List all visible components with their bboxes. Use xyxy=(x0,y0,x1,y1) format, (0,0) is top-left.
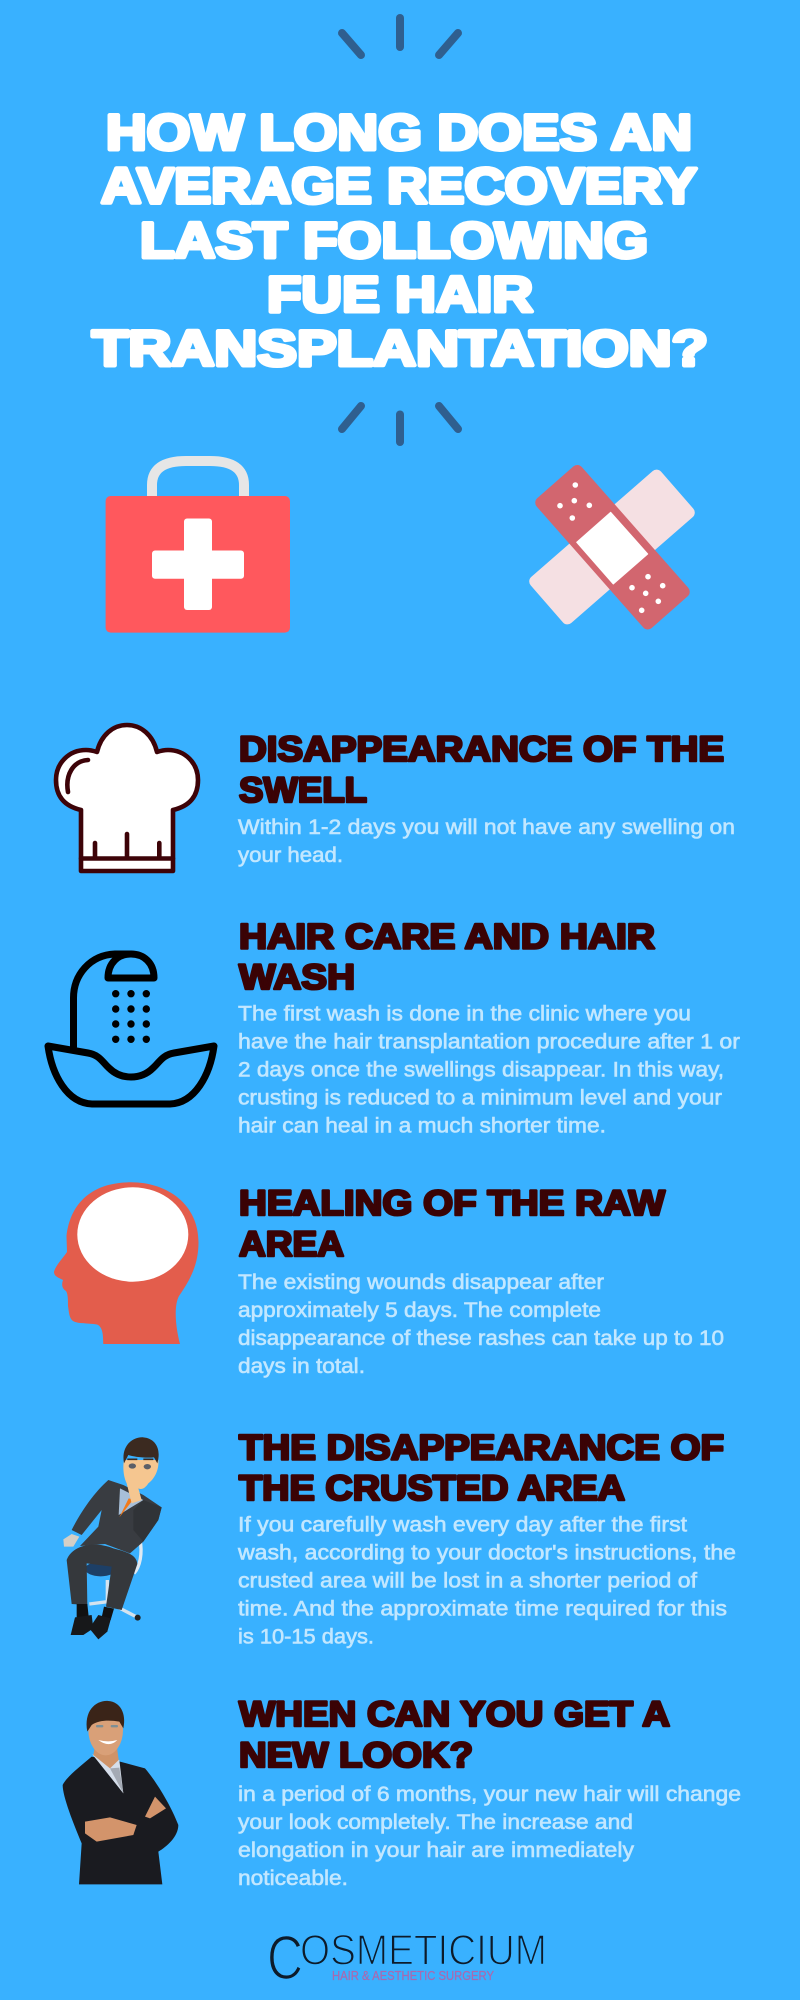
heading xyxy=(239,1184,665,1264)
title: LAST FOLLOWING xyxy=(140,212,648,268)
body text: days in total. xyxy=(238,1355,365,1378)
body text: crusted area will be lost in a shorter period of xyxy=(238,1570,697,1593)
body text xyxy=(238,1003,740,1138)
body text: in a period of 6 months, your new hair will change xyxy=(238,1783,741,1806)
title: HOW LONG DOES AN xyxy=(106,104,692,160)
body text: If you carefully wash every day after the first xyxy=(238,1514,687,1537)
body text: Within 1-2 days you will not have any swelling on xyxy=(238,816,735,839)
panel: the disappearance of the crusted area xyxy=(63,1428,736,1649)
panel: when can you get a new look xyxy=(63,1695,741,1890)
body text: The existing wounds disappear after xyxy=(238,1271,604,1294)
heading xyxy=(239,730,724,810)
heading: WHEN CAN YOU GET A xyxy=(239,1695,670,1734)
icon: head silhouette xyxy=(54,1182,198,1344)
body text: elongation in your hair are immediately xyxy=(238,1839,635,1862)
body text: have the hair transplantation procedure after 1 or xyxy=(238,1031,740,1054)
body text: wash, according to your doctor's instructions, the xyxy=(237,1542,736,1565)
icon: first aid kit xyxy=(106,461,290,633)
logo: Cosmeticium: C xyxy=(267,1924,303,1993)
title: FUE HAIR xyxy=(267,266,533,322)
logo: Cosmeticium xyxy=(267,1924,547,1993)
heading: THE DISAPPEARANCE OF xyxy=(239,1428,724,1468)
logo: Cosmeticium: OSMETICIUM xyxy=(300,1926,547,1974)
body text xyxy=(238,1783,741,1890)
heading: AREA xyxy=(239,1225,344,1264)
panel: disappearance of the swell xyxy=(56,725,735,871)
body text: approximately 5 days. The complete xyxy=(238,1299,601,1322)
panel: hair care and hair wash xyxy=(48,918,740,1138)
icon: shower and basin xyxy=(48,954,214,1104)
decorative rays above title xyxy=(342,18,458,55)
heading: HAIR CARE AND HAIR xyxy=(239,918,655,956)
title: AVERAGE RECOVERY xyxy=(101,158,697,214)
heading: HEALING OF THE RAW xyxy=(239,1184,665,1223)
decorative rays below title xyxy=(342,406,458,442)
icon: smiling businessman with crossed arms xyxy=(63,1701,178,1884)
body text: hair can heal in a much shorter time. xyxy=(238,1115,606,1138)
body text: your head. xyxy=(238,844,343,867)
body text xyxy=(238,816,735,867)
body text: disappearance of these rashes can take up to 10 xyxy=(238,1327,724,1350)
body text: your look completely. The increase and xyxy=(238,1811,633,1834)
body text: is 10-15 days. xyxy=(238,1626,374,1649)
logo: Cosmeticium: HAIR & AESTHETIC SURGERY xyxy=(332,1968,494,1983)
panel: healing of the raw area xyxy=(54,1182,724,1378)
body text: The first wash is done in the clinic where you xyxy=(238,1003,691,1026)
icon: chef hat xyxy=(56,725,198,871)
heading: SWELL xyxy=(239,771,367,810)
icon: crossed bandages xyxy=(527,462,697,632)
title xyxy=(92,104,708,376)
body text xyxy=(238,1271,724,1378)
heading: NEW LOOK? xyxy=(239,1736,473,1775)
icon: thinking businessman on chair xyxy=(63,1437,162,1639)
heading xyxy=(239,918,655,997)
heading: WASH xyxy=(239,958,355,997)
title: TRANSPLANTATION? xyxy=(92,320,708,376)
heading xyxy=(239,1428,724,1508)
body text xyxy=(237,1514,736,1649)
body text: time. And the approximate time required for this xyxy=(238,1598,727,1621)
body text: crusting is reduced to a minimum level and your xyxy=(238,1087,722,1110)
heading xyxy=(239,1695,670,1775)
heading: THE CRUSTED AREA xyxy=(239,1469,625,1508)
heading: DISAPPEARANCE OF THE xyxy=(239,730,724,769)
body text: noticeable. xyxy=(238,1867,348,1890)
body text: 2 days once the swellings disappear. In this way, xyxy=(238,1059,724,1082)
